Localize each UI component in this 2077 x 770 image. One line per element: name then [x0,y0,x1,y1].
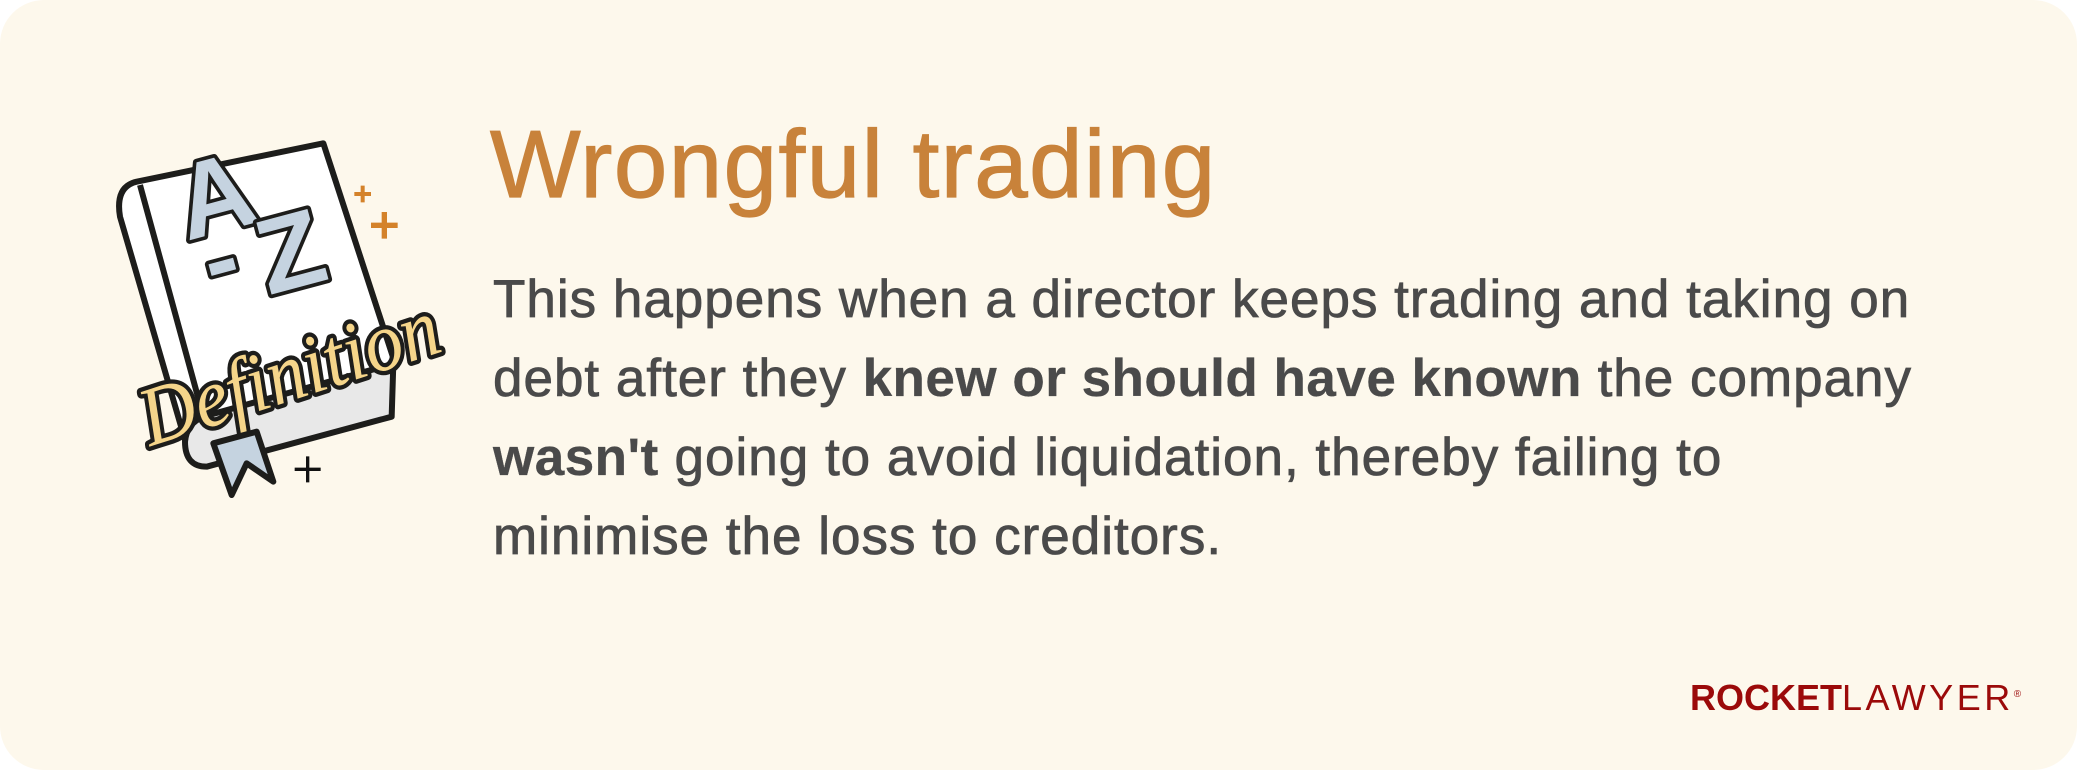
bookmark [213,432,273,495]
A-Z letters: - [190,201,251,317]
body text: This happens when a director keeps trading and taking on [493,270,1910,329]
body text: wasn't going to avoid liquidation, thereby failing to [493,428,1722,487]
body text: debt after they knew or should have known the company [493,349,1912,408]
body text: minimise the loss to creditors. [493,507,1222,566]
A-Z letters: Z [243,185,337,318]
body text [492,270,1912,566]
logo: Rocket Lawyer: ROCKETLAWYER® [1690,677,2021,718]
icon: definition book [116,127,450,498]
A-Z letters: A [162,127,267,263]
title: Wrongful trading [490,111,1217,218]
book cover [119,143,395,440]
A-Z letters [162,127,337,318]
sparkles [295,186,398,482]
book page block [185,363,393,467]
